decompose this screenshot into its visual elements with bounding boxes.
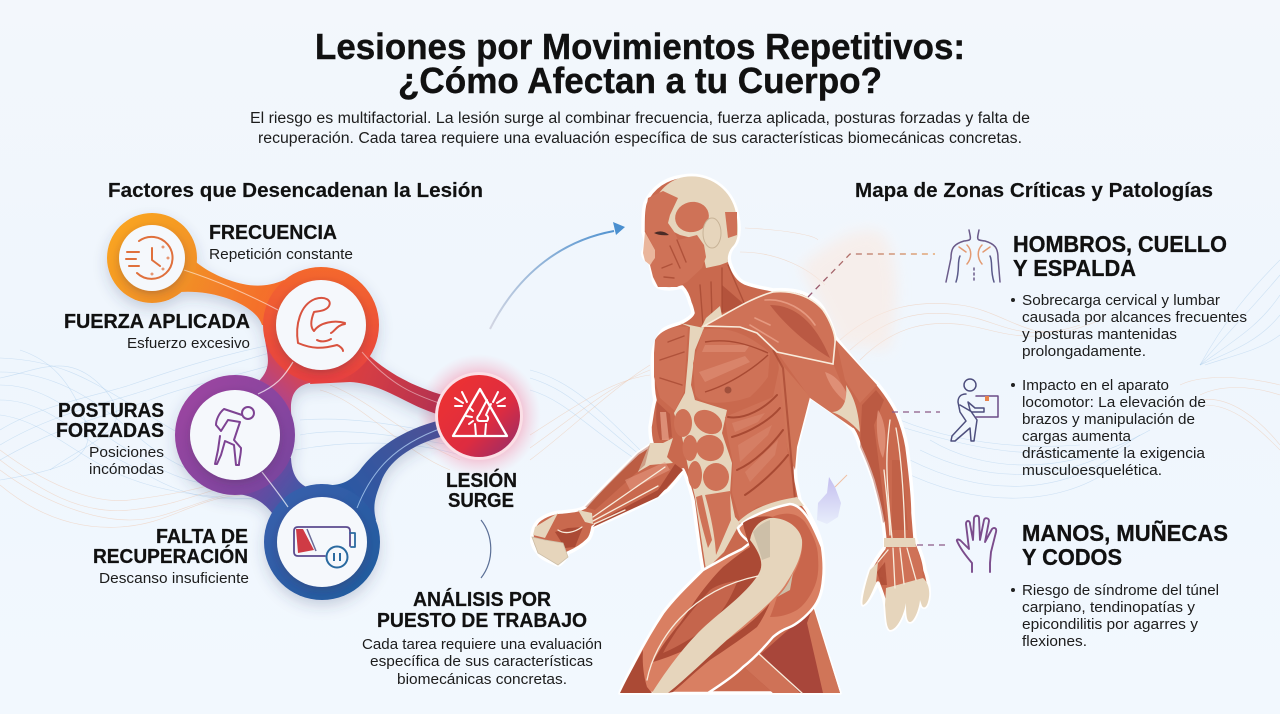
zone: manos heading: MANOS, MUÑECAS — [1022, 519, 1228, 546]
heading: mapa: Mapa de Zonas Críticas y Patologías — [855, 180, 1213, 202]
zone: hombros bullet two: brazos y manipulación de — [1022, 412, 1195, 428]
anatomical figure — [532, 175, 929, 693]
skull — [650, 176, 738, 268]
background waves: centre — [295, 370, 640, 462]
label: falta de recuperacion: Descanso insuficiente — [99, 571, 249, 587]
forearm back — [860, 390, 886, 523]
zone: manos bullet: Riesgo de síndrome del túnel — [1022, 583, 1219, 599]
back leg — [745, 608, 840, 693]
abdominals — [674, 409, 692, 437]
dashed leader: arm — [892, 411, 940, 413]
analysis block — [362, 588, 602, 688]
lesion glow — [417, 354, 541, 478]
zone: manos bullet: flexiones. — [1022, 634, 1087, 650]
node: lesion icon — [435, 372, 523, 460]
fist — [578, 510, 593, 524]
label: posturas forzadas: Posiciones — [89, 445, 164, 461]
zone: hombros bullet one: prolongadamente. — [1022, 344, 1146, 360]
icon: back and shoulders — [946, 230, 1000, 282]
zone: hombros bullet one — [1011, 293, 1247, 360]
subtitle: recuperación. Cada tarea requiere una evaluación específica de sus características biomecánicas concretas. — [258, 130, 1022, 147]
label: falta de recuperacion: RECUPERACIÓN — [93, 544, 248, 568]
analysis block: PUESTO DE TRABAJO — [377, 610, 587, 632]
silhouette — [532, 175, 929, 693]
zone: manos bullet: carpiano, tendinopatías y — [1022, 600, 1196, 616]
label: falta de recuperacion — [93, 526, 249, 587]
label: posturas forzadas — [56, 400, 164, 478]
curve to analysis — [481, 520, 491, 578]
background waves: left orange — [0, 450, 260, 527]
zone: manos bullet — [1011, 583, 1219, 650]
label: frecuencia — [209, 222, 353, 263]
heading: factores: Factores que Desencadenan la Lesión — [108, 180, 483, 202]
subtitle — [250, 110, 1030, 147]
deltoid and trapezius — [704, 292, 835, 364]
label: lesion surge: LESIÓN — [446, 468, 517, 492]
label: frecuencia: Repetición constante — [209, 247, 353, 263]
label: falta de recuperacion: FALTA DE — [156, 526, 248, 548]
dashed leader: wrist — [917, 544, 950, 546]
node: frecuencia icon — [119, 225, 185, 291]
analysis block: ANÁLISIS POR — [413, 588, 552, 611]
zone: hombros bullet two — [1011, 378, 1206, 479]
analysis block: biomecánicas concretas. — [397, 672, 567, 688]
label: fuerza aplicada: FUERZA APLICADA — [64, 311, 250, 333]
label: fuerza aplicada: Esfuerzo excesivo — [127, 336, 250, 352]
torso: sternum and abdominal sheath — [674, 323, 740, 570]
lilac droplet — [817, 475, 847, 524]
front arm — [656, 402, 672, 440]
label: lesion surge: SURGE — [448, 490, 514, 512]
label: frecuencia: FRECUENCIA — [209, 222, 337, 244]
analysis block: específica de sus características — [370, 654, 593, 670]
zone: hombros heading — [1013, 231, 1227, 281]
wrist band — [884, 538, 916, 547]
dashed leader: shoulder — [808, 254, 935, 297]
connector highlights — [184, 270, 278, 310]
background waves: left — [0, 345, 300, 500]
zone: hombros bullet two: cargas aumenta — [1022, 429, 1132, 445]
icon: person carrying box — [951, 379, 998, 441]
obliques and side — [725, 363, 795, 520]
background waves: right blue — [895, 260, 1280, 498]
subtitle: El riesgo es multifactorial. La lesión surge al combinar frecuencia, fuerza aplicada, posturas forzadas y falta de — [250, 110, 1030, 127]
shoulder background blob — [800, 231, 896, 350]
zone: hombros heading: Y ESPALDA — [1013, 255, 1136, 281]
node: recuperacion icon — [277, 497, 367, 587]
factor network diagram — [107, 213, 541, 600]
background waves: right orange — [740, 228, 1280, 450]
label: posturas forzadas: incómodas — [89, 462, 164, 478]
title: Lesiones por Movimientos Repetitivos: — [315, 26, 965, 67]
zone: manos heading — [1022, 519, 1228, 570]
zone: hombros bullet two: drásticamente la exigencia — [1022, 446, 1206, 462]
label: posturas forzadas: FORZADAS — [56, 420, 164, 442]
title — [315, 26, 965, 101]
zone: hombros bullet one: causada por alcances frecuentes — [1022, 310, 1247, 326]
title: ¿Cómo Afectan a tu Cuerpo? — [398, 60, 882, 101]
zone: hombros bullet two: locomotor: La elevación de — [1022, 395, 1206, 411]
face muscles — [645, 191, 706, 287]
zone: hombros bullet two: musculoesquelética. — [1022, 463, 1162, 479]
analysis block: Cada tarea requiere una evaluación — [362, 637, 602, 653]
zone: hombros bullet two: Impacto en el aparato — [1022, 378, 1169, 394]
groin tendon band — [738, 497, 804, 525]
zone: hombros heading: HOMBROS, CUELLO — [1013, 231, 1227, 257]
icon: hand — [957, 516, 996, 572]
zone: manos bullet: epicondilitis por agarres y — [1022, 617, 1199, 633]
upper back arm — [777, 352, 853, 428]
arrow to body — [490, 222, 625, 329]
label: fuerza aplicada — [64, 311, 250, 352]
zone: hombros bullet one: Sobrecarga cervical y lumbar — [1022, 293, 1220, 309]
label: lesion surge — [446, 468, 517, 512]
hand back — [878, 547, 923, 590]
node: posturas icon — [190, 390, 280, 480]
zone: manos heading: Y CODOS — [1022, 544, 1122, 570]
far pectoral — [693, 329, 770, 403]
near pectoral — [654, 327, 688, 411]
zone: hombros bullet one: y posturas mantenidas — [1022, 327, 1177, 343]
connectors and rings — [107, 213, 446, 600]
thigh and hip — [620, 504, 824, 693]
label: posturas forzadas: POSTURAS — [58, 400, 164, 422]
neck — [722, 285, 745, 313]
background waves: centre orange — [320, 365, 650, 470]
node: fuerza icon — [276, 280, 366, 370]
